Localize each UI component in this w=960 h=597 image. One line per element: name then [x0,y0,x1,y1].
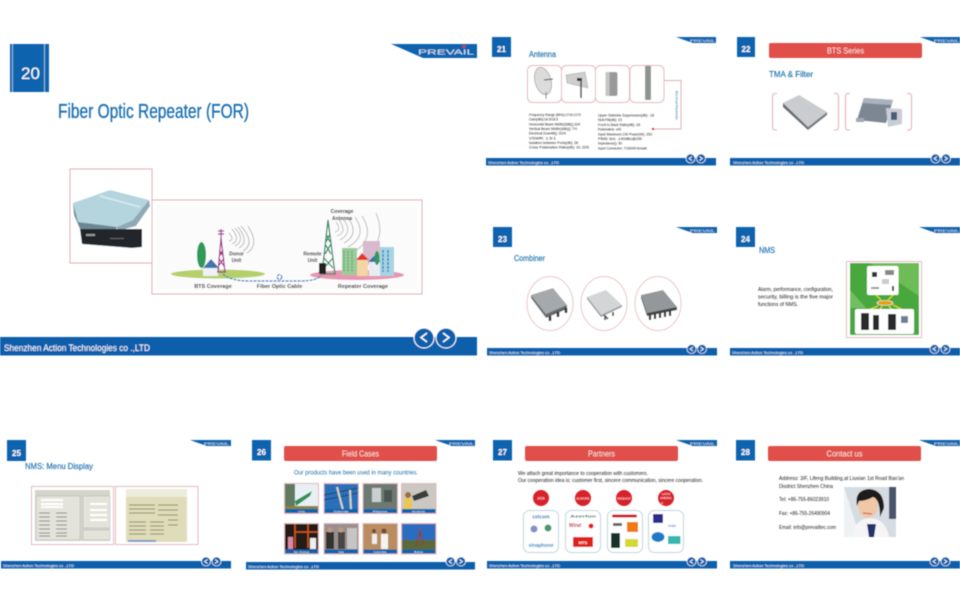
footer bar: Shenzhen Action Technologies co .,LTD [733,563,804,568]
region badge: EUROPE [577,496,589,500]
photo: Ed. Guinea: Ed. Guinea [294,550,309,554]
footer bar: Shenzhen Action Technologies co .,LTD [4,343,150,354]
text block: parameters right: Null-Fill(dB): 23 [598,117,623,122]
text block: parameters right: PIMD 3rd: -140dBc@2W [598,136,642,141]
nav buttons [686,154,706,163]
panel: combiner one [527,276,573,330]
heading banner [284,446,437,461]
slide number tab: 28 [741,448,750,457]
photo: customer service agent [844,487,896,537]
footer bar: Shenzhen Action Technologies co .,LTD [488,160,559,165]
heading banner: Field Cases [342,450,379,458]
heading banner: Contact us [826,450,862,458]
slide number tab: 27 [498,448,507,457]
footer bar: Shenzhen Action Technologies co .,LTD [489,350,560,355]
footer bar: Shenzhen Action Technologies co .,LTD [733,160,804,165]
slide number tab [10,44,49,92]
footer bar [487,348,717,356]
text block: parameters left: Horizontal Beam Width(3dB)():32# [529,121,581,126]
slide number tab: 20 [21,64,40,83]
region badge: A [661,501,663,505]
panel: antenna photos [528,65,664,102]
text block: parameters right: Polarization: ±45 [598,127,622,132]
BTS coverage label: BTS Coverage [194,284,232,290]
text block: parameters right: Upper Sidelobe Suppression(dB): -18 [598,112,655,118]
text block: parameters right: Input Maximum CW Power(W): 250 [598,131,653,136]
upper network panel [867,266,898,295]
slide number tab [493,440,512,460]
heading banner: BTS Series [827,46,864,56]
text block: parameters right: Input Connector: 7/16DIN female [598,145,648,150]
slide number tab [492,37,511,57]
text block: parameters left: Vertical Beam Width(3dB)(): 7½ [529,126,578,131]
NMS network diagram [846,262,922,338]
text block: parameters left: Frequency Range (MHz):1710-2170 [529,112,582,117]
footer bar [487,561,717,568]
photo: Unity: Unity [298,510,305,514]
footer bar [730,158,960,166]
photo: Colombia [363,524,398,554]
footer bar [730,561,960,568]
cable label: Fiber Optic Cable [257,284,302,290]
partner: umniah [625,539,638,547]
text block: parameters left: Cross Polarization Ratio(dB): 15, 20/5 [529,145,590,150]
logo: PREVAIL [934,442,959,446]
donor signal waves [229,226,254,253]
logo: PREVAIL [934,229,959,233]
title: NMS [759,246,775,255]
region: Mideast [608,490,642,552]
text block: parameters right: Front to Back Ratio(dB): 28 [598,122,641,127]
partner: orange [627,522,638,532]
screenshot: menu settings [32,486,114,544]
lower equipment panel [855,309,914,334]
photo: panel antenna [596,66,630,102]
slide number tab: 22 [742,45,751,54]
photo: Bolivia [402,524,436,554]
text block: contact details: Email: info@prevailtec.com [779,525,836,531]
logo [435,440,475,446]
text block: parameters right [598,112,655,150]
photo: Philippines [363,484,398,514]
heading banner [525,446,678,461]
logo [920,37,960,43]
text block: parameters left: Isolation between Ports(dB): 28 [529,140,579,145]
nav buttons [414,328,456,348]
nav buttons [930,344,950,354]
bracket marker [652,128,654,130]
title: Fiber Optic Repeater (FOR) [58,101,249,123]
signal lightning links [866,295,905,311]
text block: NMS functions: security, billing is the five major [758,294,833,300]
logo [919,227,960,233]
coverage antenna label: Coverage [331,209,354,215]
photo: omni antenna [630,66,664,102]
region: Europe [566,490,600,552]
logo [676,227,717,233]
slide number tab: 25 [12,449,21,458]
slide 26: field cases [246,440,475,570]
slide number tab [736,227,755,247]
remote unit label second line: Unit [308,258,318,264]
text block: parameters left: Electrical Downtilt(): 0/2/4 [529,131,567,136]
logo: PREVAIL [690,39,715,43]
slide 25: NMS menu display [1,440,231,568]
subtitle: TMA & Filter [769,70,813,79]
footer bar: Shenzhen Action Technologies co .,LTD [489,563,560,568]
footer bar: Shenzhen Action Technologies co .,LTD [3,563,74,568]
repeater coverage ground [310,270,404,280]
photo: Colombia: Colombia [374,550,387,554]
slide number tab: 21 [497,45,506,54]
panel: combiner three [635,276,681,330]
title: Combiner [514,254,545,263]
footer bar [730,348,960,356]
partner: celcom: celcom [532,514,550,520]
logo: PREVAIL [690,442,715,446]
text block: contact details: Fax: +86-755-26490904 [779,511,830,517]
slide 27: partners [487,440,717,568]
photo: dish antenna [528,65,562,102]
photo: grid antenna [562,66,596,102]
house [202,259,220,276]
photo: Honduras [402,484,436,514]
slide number tab [252,440,271,460]
footer bar [246,562,475,570]
text block: contact details: Tel: +86-755-86023910 [779,497,829,503]
title: NMS: Menu Display [25,462,93,471]
logo [919,440,960,446]
partner: entel: entel [668,524,676,528]
nav buttons [687,344,706,354]
region badge: MIDEAST [617,496,631,500]
photo: Guatemala: Guatemala [334,510,349,514]
panel: combiner two [581,276,627,330]
partner: MTS: MTS [579,540,588,545]
coverage tower [321,220,336,274]
partner: ooredoo [612,514,637,518]
nav buttons [687,557,706,566]
text block: contact details: Address: 3/F, Lifeng Building,at Liuxian 1st Road Bao'an [779,476,904,482]
photo: Guatemala [324,484,358,514]
heading banner: Partners [588,450,615,458]
nav buttons [930,557,950,566]
logo: PREVAIL [934,39,959,43]
logo: PREVAIL [204,442,229,446]
partner: azerfon: Azerfon [570,514,597,518]
remote unit [319,263,326,274]
slide number tab: 26 [257,448,266,457]
slide 24: NMS [730,227,960,356]
donor unit label: Donor [229,252,244,258]
text block: parameters right: Impedance(): 50 [598,141,623,146]
coverage signal waves [335,213,380,252]
slide 22: BTS series [730,37,960,166]
region badge: ASIA [537,496,546,500]
logo [190,440,231,446]
bracket: electrical parameter [654,80,681,129]
text block: contact details: Disdrict Shenzhen China [779,484,833,490]
slide 23: combiner [487,227,717,356]
region badge [658,490,674,506]
photo: Unity [284,484,318,514]
footer bar [0,337,477,356]
BTS coverage ground [171,270,265,278]
footer bar: Shenzhen Action Technologies co .,LTD [248,564,319,569]
text block: cooperation: Our cooperation idea is: customer first, sincere communication, sincere cooperation. [518,478,703,484]
donor tower [217,229,226,272]
nav buttons [931,154,950,163]
text block: NMS functions [758,287,833,308]
slide number tab: 23 [498,235,507,244]
text block: contact details [779,476,904,531]
partner: vinaphone: vinaphone [528,543,554,549]
text block: parameters left: VSWR: 1.5:1 [529,135,557,140]
photo: Bolivia: Bolivia [414,550,423,554]
panel: repeater product photo [70,169,152,263]
footer bar [1,561,231,568]
logo: PREVAIL [690,229,715,233]
photo: Philippines: Philippines [373,510,388,514]
footer bar [486,158,716,166]
screenshot: parameter display [116,486,198,544]
photo: Iraq [324,524,358,554]
region: Latin America [648,490,684,552]
logo [676,440,717,446]
region: Asia [524,490,558,552]
intro text: Our products have been used in many countries. [294,470,418,476]
nav buttons [446,557,466,566]
slide 28: contact us [730,440,960,568]
region badge: LATIN [662,492,670,496]
coverage antenna label second line: Antenna [332,216,352,222]
central hub [877,300,893,306]
slide 20: fiber optic repeater [0,44,477,356]
slide number tab [493,227,512,247]
fiber optic cable [223,274,321,281]
slide 21: antenna [486,37,716,166]
panel: filter product [846,94,912,130]
logo [676,37,716,43]
title: Antenna [529,50,556,59]
slide number tab [737,37,755,57]
panel: coverage diagram [152,200,422,294]
remote unit label: Remote [303,252,322,258]
partner: wind: Wind [569,523,581,529]
text block: parameters left [529,112,590,150]
electrical parameter label: Electrical Parameter [674,91,678,121]
photo: Ed. Guinea [284,524,318,554]
footer bar: Shenzhen Action Technologies co .,LTD [732,350,803,355]
logo: PREVAIL [418,50,474,56]
slide number tab [736,440,755,460]
text block: NMS functions: Alarm, performance, configuration, [758,287,833,293]
logo: PREVAIL [449,442,474,446]
logo [391,44,477,58]
donor unit label second line: Unit [232,258,242,264]
text block: cooperation [518,471,703,484]
text block: NMS functions: functions of NMS. [758,302,798,308]
region badge: AMERIC [660,496,673,500]
repeater coverage label: Repeater Coverage [338,284,388,290]
heading banner [768,446,921,461]
tree [197,242,206,268]
nav buttons [202,557,221,566]
city buildings [342,241,394,276]
panel: TMA product [772,94,838,130]
text block: cooperation: We attach great importance to cooperation with customers. [518,471,648,477]
slide number tab: 24 [741,235,750,244]
photo: Iraq: Iraq [338,550,344,554]
photo: Honduras: Honduras [412,510,426,514]
heading banner [769,43,922,58]
slide number tab [7,440,26,461]
text block: parameters left: Gain(dBi):18.5/18.5 [529,117,559,122]
